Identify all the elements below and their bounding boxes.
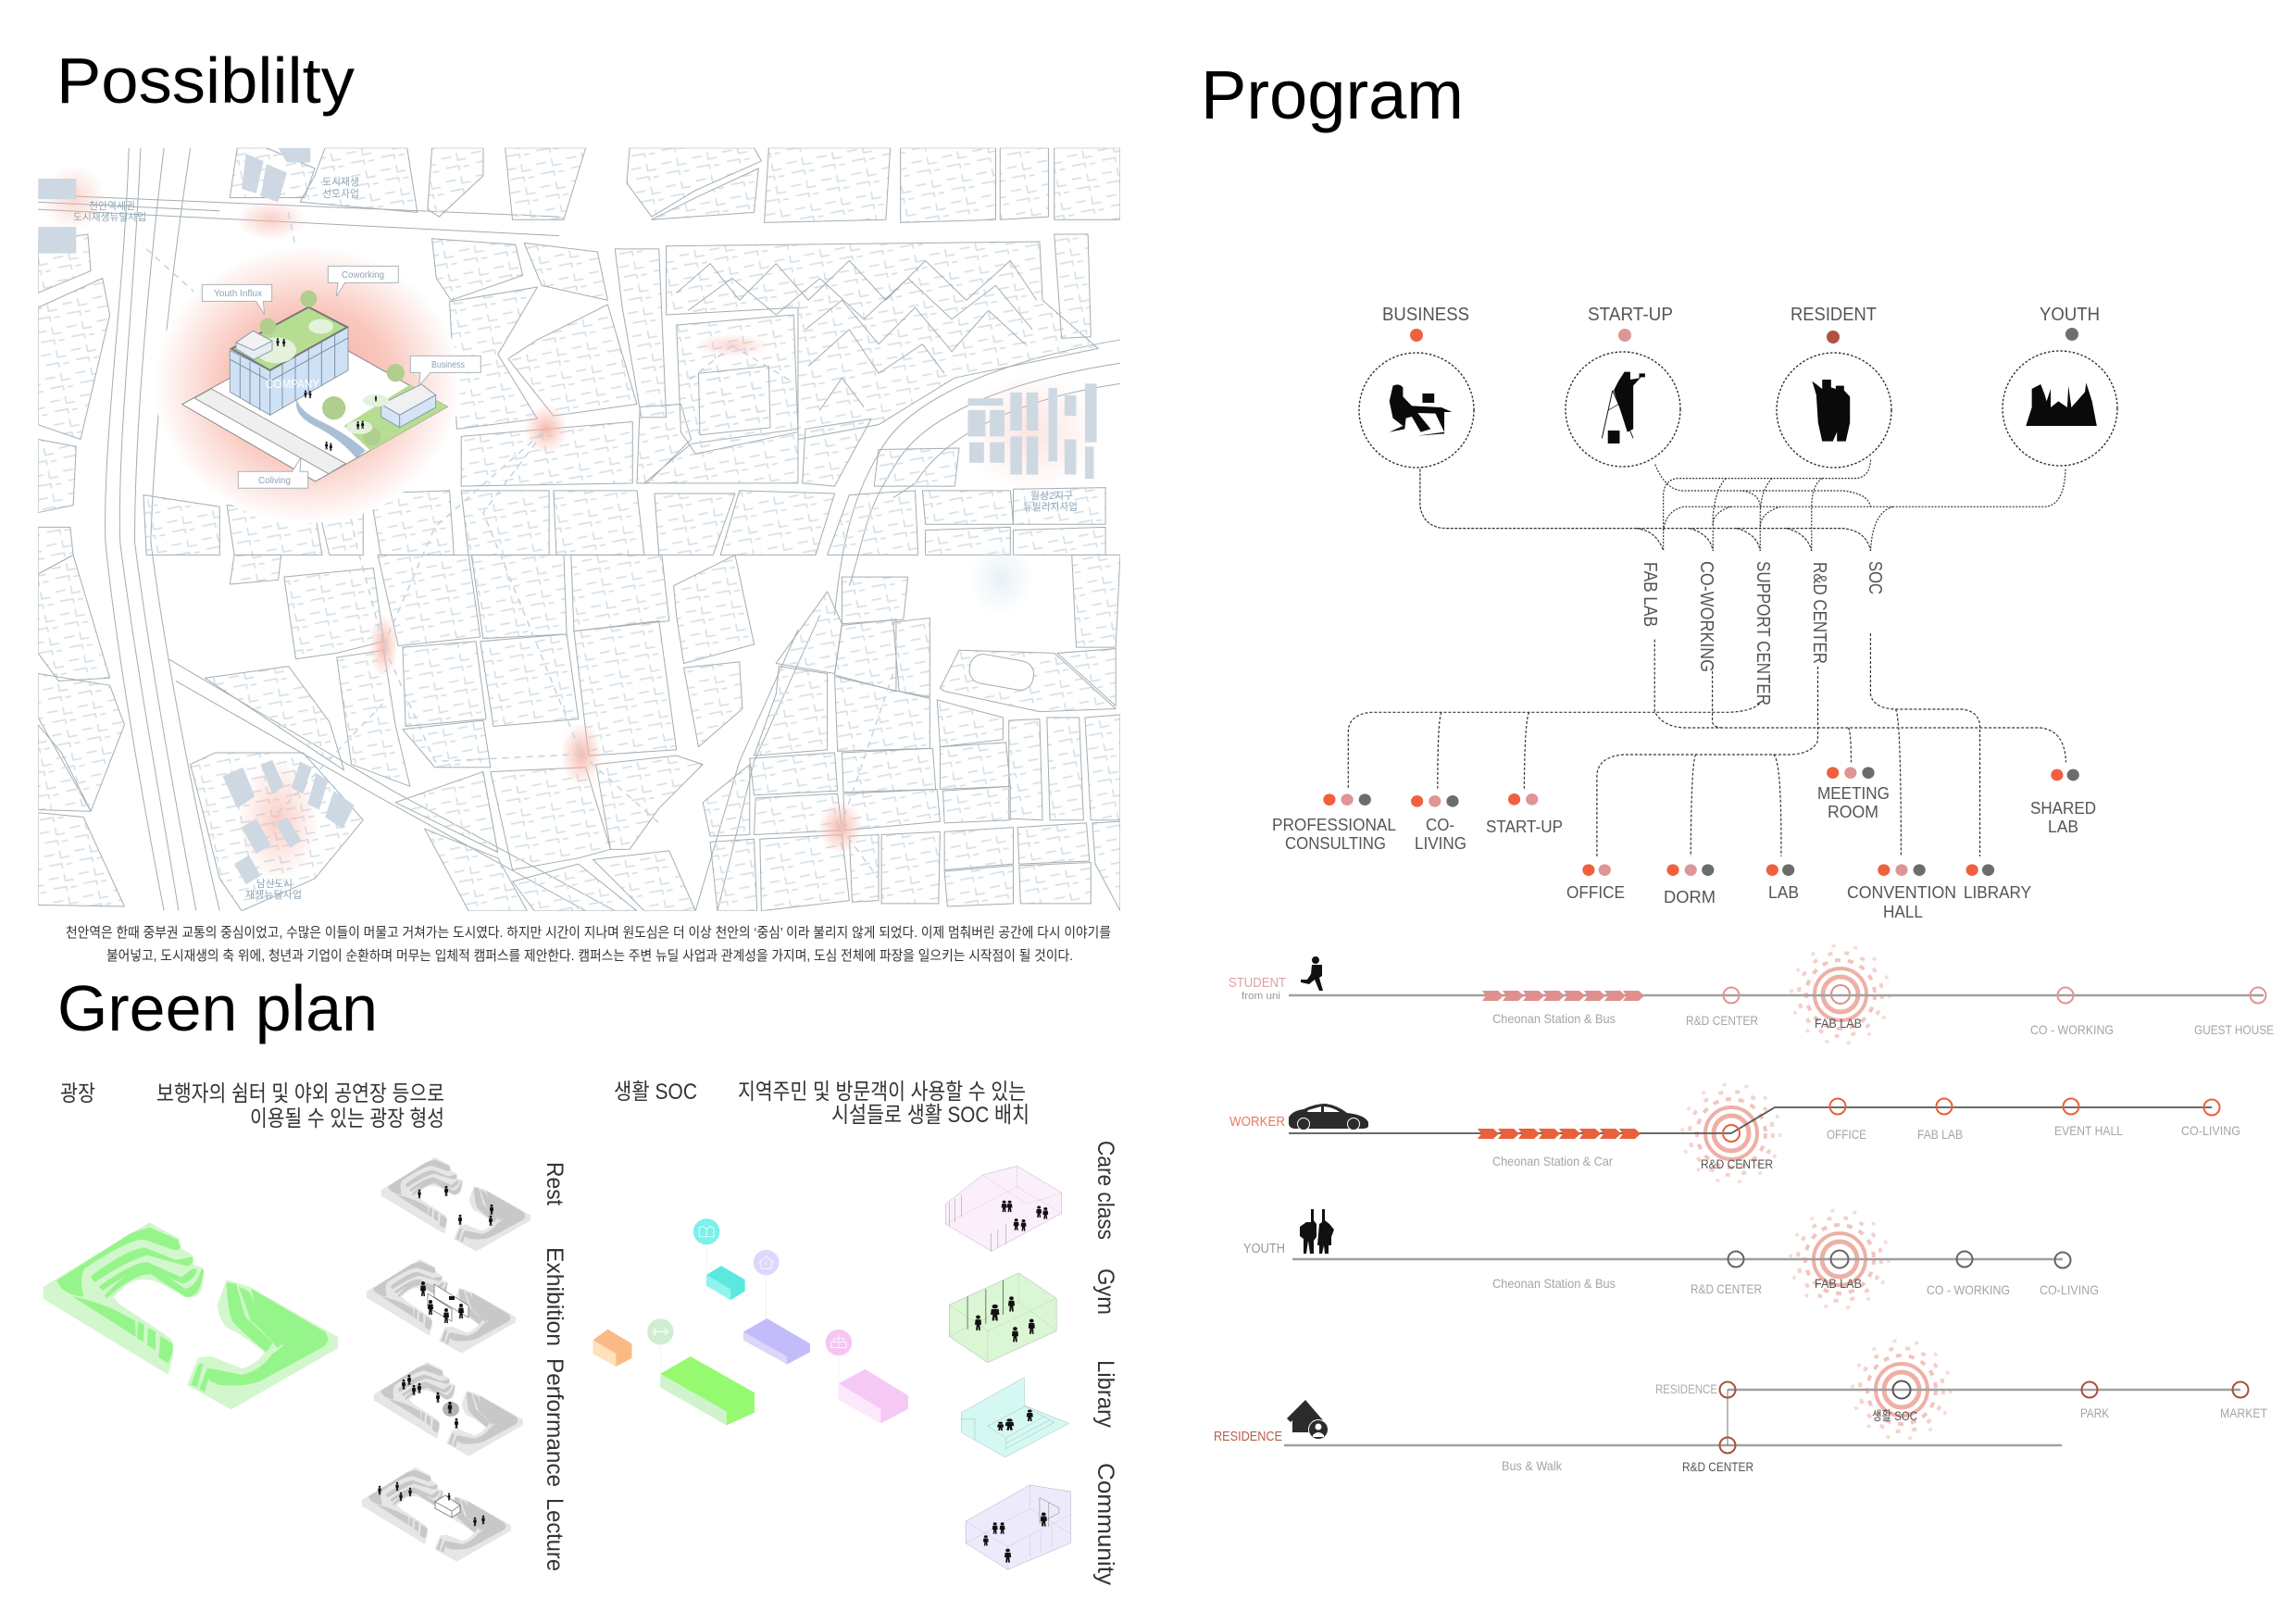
- icon: runner: [1301, 956, 1323, 991]
- route: student: Cheonan Station & Bus: [1492, 1011, 1616, 1026]
- route: student: GUEST HOUSE: [2194, 1022, 2274, 1037]
- route: worker: WORKER: [1229, 1114, 1285, 1130]
- heading: living SOC: 생활 SOC: [614, 1080, 697, 1105]
- route: student: CO - WORKING: [2030, 1022, 2114, 1037]
- label: convention hall: HALL: [1883, 903, 1923, 921]
- label: library: Library: [1092, 1360, 1118, 1428]
- site glow: [155, 245, 460, 523]
- label: office: OFFICE: [1566, 883, 1625, 902]
- box: purple: [743, 1318, 810, 1365]
- route: student: R&D CENTER: [1686, 1013, 1758, 1028]
- title: Green plan: Green plan: [57, 972, 378, 1044]
- route: student: STUDENT: [1229, 975, 1286, 991]
- text block: plaza description: 이용될 수 있는 광장 형성: [250, 1106, 444, 1131]
- box: cyan: [706, 1266, 745, 1300]
- site label: youth influx: Youth Influx: [214, 289, 262, 299]
- panel: urban context map: [38, 148, 1120, 911]
- route: youth: R&D CENTER: [1691, 1281, 1762, 1296]
- map label: station area new deal: 도시재생뉴딜사업: [73, 211, 146, 223]
- stakeholder: business: BUSINESS: [1382, 305, 1469, 325]
- route: student: FAB LAB: [1815, 1016, 1862, 1031]
- site label: company: COMPANY: [266, 377, 319, 391]
- map label: leading regeneration project: 선도사업: [322, 188, 359, 200]
- label: dorm: DORM: [1664, 888, 1716, 906]
- route: residence: Bus & Walk: [1502, 1458, 1563, 1473]
- room: library: [961, 1378, 1069, 1457]
- marker: library: [693, 1218, 719, 1244]
- map label: station area new deal: 천안역세권: [89, 199, 135, 212]
- route: worker: OFFICE: [1827, 1127, 1866, 1142]
- map label: wolseong district: 뉴빌리지사업: [1023, 501, 1078, 513]
- isometric site with company building: [182, 266, 480, 488]
- route: residence: 생활 SOC: [1872, 1408, 1917, 1423]
- diagram: rest plaza: [381, 1157, 530, 1252]
- route: youth: YOUTH: [1243, 1241, 1285, 1256]
- leader lines: [660, 1244, 839, 1383]
- route: worker: R&D CENTER: [1701, 1156, 1773, 1171]
- text block: map caption: 천안역은 한때 중부권 교통의 중심이었고, 수많은 이들이 머물고 거쳐가는 도시였다. 하지만 시간이 지나며 원도심은 더 이상 천안의 ‘중심’ 이라 불리지 않게 되었다. 이제 멈춰버린 공간에 다시 이야기를: [66, 925, 1111, 941]
- route: youth: Cheonan Station & Bus: [1492, 1276, 1616, 1291]
- label: rest: Rest: [542, 1162, 568, 1206]
- route: worker: CO-LIVING: [2181, 1123, 2240, 1138]
- label: exhibition: Exhibition: [542, 1247, 568, 1346]
- label: shared lab: SHARED: [2030, 799, 2096, 818]
- room: care class: [945, 1166, 1062, 1251]
- icon: youth figures: [1300, 1209, 1334, 1254]
- room: gym: [949, 1273, 1056, 1363]
- room: community: [966, 1485, 1071, 1569]
- diagram: exhibition plaza: [367, 1259, 516, 1354]
- route: residence: R&D CENTER: [1682, 1459, 1753, 1474]
- stakeholder: start-up: [1566, 305, 1680, 467]
- site label: business: Business: [431, 360, 465, 370]
- route: residence: [1214, 1341, 2267, 1474]
- heading: plaza: 광장: [60, 1081, 95, 1106]
- stakeholder: business: [1359, 305, 1474, 468]
- route: worker: FAB LAB: [1917, 1127, 1963, 1142]
- icon: house with person: [1287, 1400, 1328, 1439]
- label: convention hall: CONVENTION: [1847, 883, 1956, 902]
- stakeholder: youth: [2003, 305, 2117, 466]
- icon: car: [1289, 1104, 1368, 1130]
- label: gym: Gym: [1092, 1268, 1118, 1315]
- label: professional consulting: PROFESSIONAL: [1272, 816, 1396, 834]
- label: co-working: CO-WORKING: [1696, 561, 1716, 672]
- label: library program: LIBRARY: [1964, 883, 2031, 902]
- map label: leading regeneration project: 도시재생: [322, 176, 359, 188]
- label: support center: SUPPORT CENTER: [1753, 561, 1773, 706]
- title: Possiblilty: Possiblilty: [56, 44, 355, 117]
- route: residence: RESIDENCE: [1655, 1381, 1717, 1396]
- route: youth: FAB LAB: [1815, 1276, 1862, 1291]
- label: shared lab: LAB: [2048, 818, 2078, 836]
- stakeholder: start-up: START-UP: [1588, 305, 1673, 325]
- marker: gym: [647, 1318, 674, 1344]
- map label: wolseong district: 월성2지구: [1030, 490, 1073, 502]
- marker: care: [826, 1330, 852, 1355]
- label: care class: Care class: [1092, 1141, 1118, 1240]
- label: start-up program: START-UP: [1486, 818, 1563, 836]
- stakeholder: resident: RESIDENT: [1791, 305, 1877, 325]
- route: student: [1229, 945, 2274, 1043]
- route: worker: EVENT HALL: [2054, 1123, 2123, 1138]
- route: youth: CO-LIVING: [2040, 1282, 2099, 1297]
- text block: map caption: 불어넣고, 도시재생의 축 위에, 청년과 기업이 순환하며 머무는 입체적 캠퍼스를 제안한다. 캠퍼스는 주변 뉴딜 사업과 관계성을 가지며, 도심 전체에 파장을 일으키는 시작점이 될 것이다.: [106, 948, 1073, 964]
- route: residence: MARKET: [2220, 1405, 2267, 1420]
- route: residence: PARK: [2080, 1405, 2110, 1420]
- label: SOC: SOC: [1865, 561, 1885, 594]
- map label: namsan new deal: 남산도시: [256, 878, 293, 890]
- label: R&D center: R&D CENTER: [1809, 562, 1829, 664]
- box: pink: [839, 1369, 908, 1423]
- label: fab lab: FAB LAB: [1640, 562, 1660, 627]
- diagram: SOC programme massing: [593, 1218, 908, 1425]
- connectors: stakeholders to facilities: [1420, 460, 2065, 551]
- diagram: lecture plaza: [362, 1468, 511, 1562]
- text block: plaza description: 보행자의 쉼터 및 야외 공연장 등으로: [156, 1081, 444, 1106]
- connectors: facilities to programs: [1348, 633, 2065, 856]
- title: Program: Program: [1201, 56, 1464, 133]
- panel: program stakeholder diagram: [1272, 305, 2117, 921]
- label: meeting room: MEETING: [1817, 784, 1890, 803]
- project node glows: [41, 166, 1100, 881]
- diagram: green plaza axonometric: [44, 1222, 338, 1409]
- site label: coworking: Coworking: [342, 270, 384, 281]
- route: worker: [1229, 1084, 2240, 1182]
- text block: SOC description: 시설들로 생활 SOC 배치: [831, 1103, 1029, 1128]
- text block: SOC description: 지역주민 및 방문객이 사용할 수 있는: [738, 1080, 1026, 1105]
- program dots: [1323, 767, 2079, 876]
- route: worker: Cheonan Station & Car: [1492, 1154, 1613, 1168]
- route: youth: CO - WORKING: [1927, 1282, 2010, 1297]
- stakeholder: youth: YOUTH: [2040, 305, 2100, 325]
- site label: coliving: Coliving: [258, 476, 291, 486]
- marker: community: [754, 1250, 779, 1275]
- label: professional consulting: CONSULTING: [1285, 834, 1386, 853]
- diagram: performance plaza: [374, 1362, 523, 1456]
- building clusters: [38, 148, 1097, 884]
- label: community: Community: [1092, 1463, 1118, 1586]
- route: youth: [1243, 1209, 2099, 1308]
- stakeholder: resident: [1777, 305, 1891, 468]
- box: orange: [593, 1330, 631, 1367]
- label: co-living: LIVING: [1415, 834, 1466, 853]
- route: residence: RESIDENCE: [1214, 1429, 1282, 1444]
- label: co-living: CO-: [1426, 816, 1454, 834]
- map label: namsan new deal: 재생뉴딜사업: [245, 889, 302, 901]
- label: lab: LAB: [1768, 883, 1799, 902]
- dashed links between project nodes: [146, 212, 893, 879]
- route: student: from uni: [1242, 991, 1280, 1002]
- label: meeting room: ROOM: [1828, 803, 1878, 821]
- label: performance: Performance: [542, 1358, 568, 1487]
- box: green: [660, 1356, 755, 1425]
- label: lecture: Lecture: [542, 1498, 568, 1571]
